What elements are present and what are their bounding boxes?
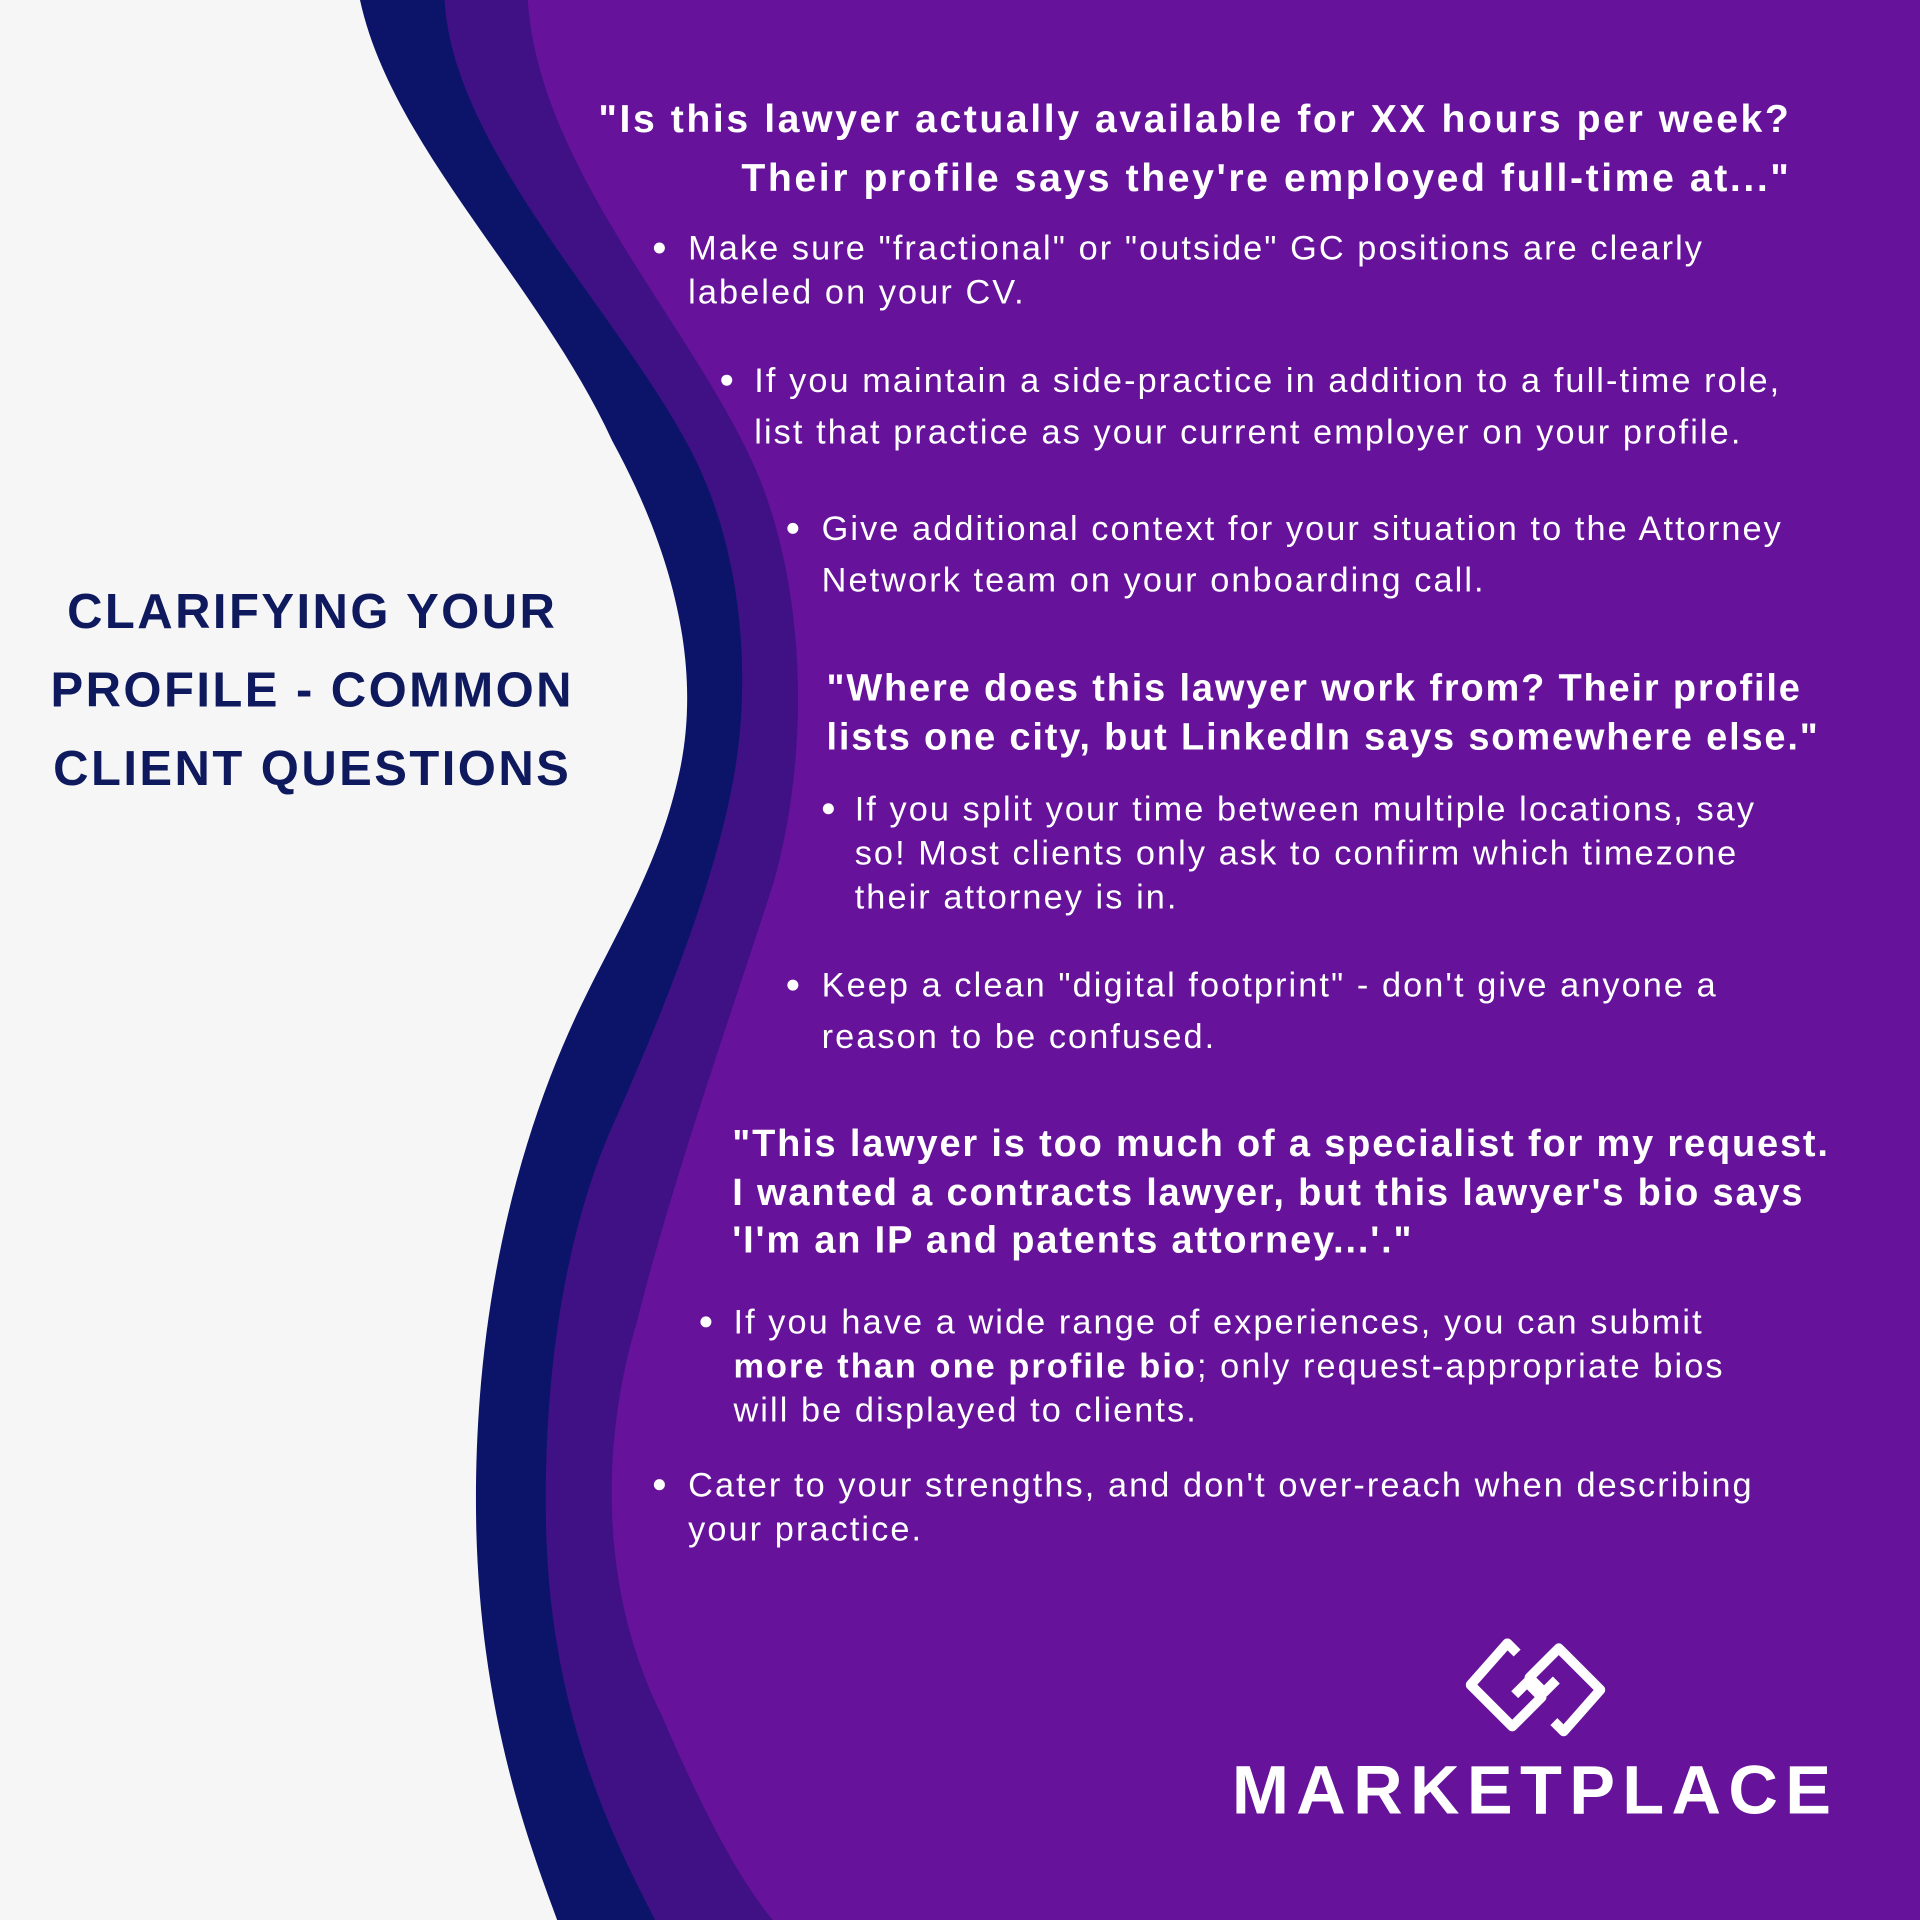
- title: [50, 585, 574, 796]
- bullet 3: Give additional context for your situation to the Attorney: [822, 509, 1783, 547]
- heading: question 3: "This lawyer is too much of a specialist for my request.: [732, 1122, 1830, 1164]
- title: CLARIFYING YOUR: [67, 585, 557, 639]
- bullet 4: If you split your time between multiple locations, say: [855, 790, 1756, 828]
- logo: [1232, 1638, 1838, 1828]
- bullet 7: your practice.: [688, 1510, 923, 1548]
- bullet 3: Network team on your onboarding call.: [822, 561, 1486, 599]
- bullet 5: reason to be confused.: [822, 1018, 1216, 1056]
- heading: question 2: lists one city, but LinkedIn says somewhere else.": [827, 714, 1820, 757]
- bullet 5: Keep a clean "digital footprint" - don't give anyone a: [822, 966, 1718, 1004]
- heading: question 3: 'I'm an IP and patents attorney...'.": [732, 1218, 1413, 1261]
- brand name: MARKETPLACE: [1232, 1751, 1838, 1828]
- bullet 4: [822, 790, 1756, 916]
- bullet 1: [654, 229, 1704, 311]
- heading: question 2: [827, 666, 1820, 758]
- bullet 4: so! Most clients only ask to confirm which timezone: [855, 834, 1738, 872]
- bullet 2: list that practice as your current employer on your profile.: [754, 413, 1742, 451]
- bullet 2: [721, 361, 1781, 451]
- heading: question 1: Their profile says they're employed full-time at...": [741, 156, 1791, 200]
- bullet 6: more than one profile bio; only request-appropriate bios: [733, 1347, 1725, 1385]
- heading: question 3: I wanted a contracts lawyer, but this lawyer's bio says: [732, 1170, 1804, 1213]
- heading: question 2: "Where does this lawyer work from? Their profile: [827, 666, 1802, 709]
- bullet 4: their attorney is in.: [855, 878, 1179, 916]
- icon: interlocking diamonds: [1466, 1638, 1606, 1736]
- bullet 5: [787, 966, 1718, 1056]
- title: PROFILE - COMMON: [50, 664, 574, 718]
- bullet 7: Cater to your strengths, and don't over-reach when describing: [688, 1466, 1754, 1504]
- bullet 6: If you have a wide range of experiences, you can submit: [733, 1303, 1704, 1341]
- bullet 6: [700, 1303, 1725, 1429]
- bullet 7: [654, 1466, 1754, 1548]
- bullet 1: labeled on your CV.: [688, 273, 1026, 311]
- bullet 2: If you maintain a side-practice in addition to a full-time role,: [754, 361, 1781, 399]
- heading: question 1: [598, 97, 1791, 200]
- heading: question 1: "Is this lawyer actually available for XX hours per week?: [598, 97, 1791, 141]
- title: CLIENT QUESTIONS: [53, 742, 571, 796]
- bullet 3: [787, 509, 1783, 599]
- bullet 1: Make sure "fractional" or "outside" GC positions are clearly: [688, 229, 1704, 267]
- heading: question 3: [732, 1122, 1830, 1261]
- bullet 6: will be displayed to clients.: [733, 1391, 1198, 1429]
